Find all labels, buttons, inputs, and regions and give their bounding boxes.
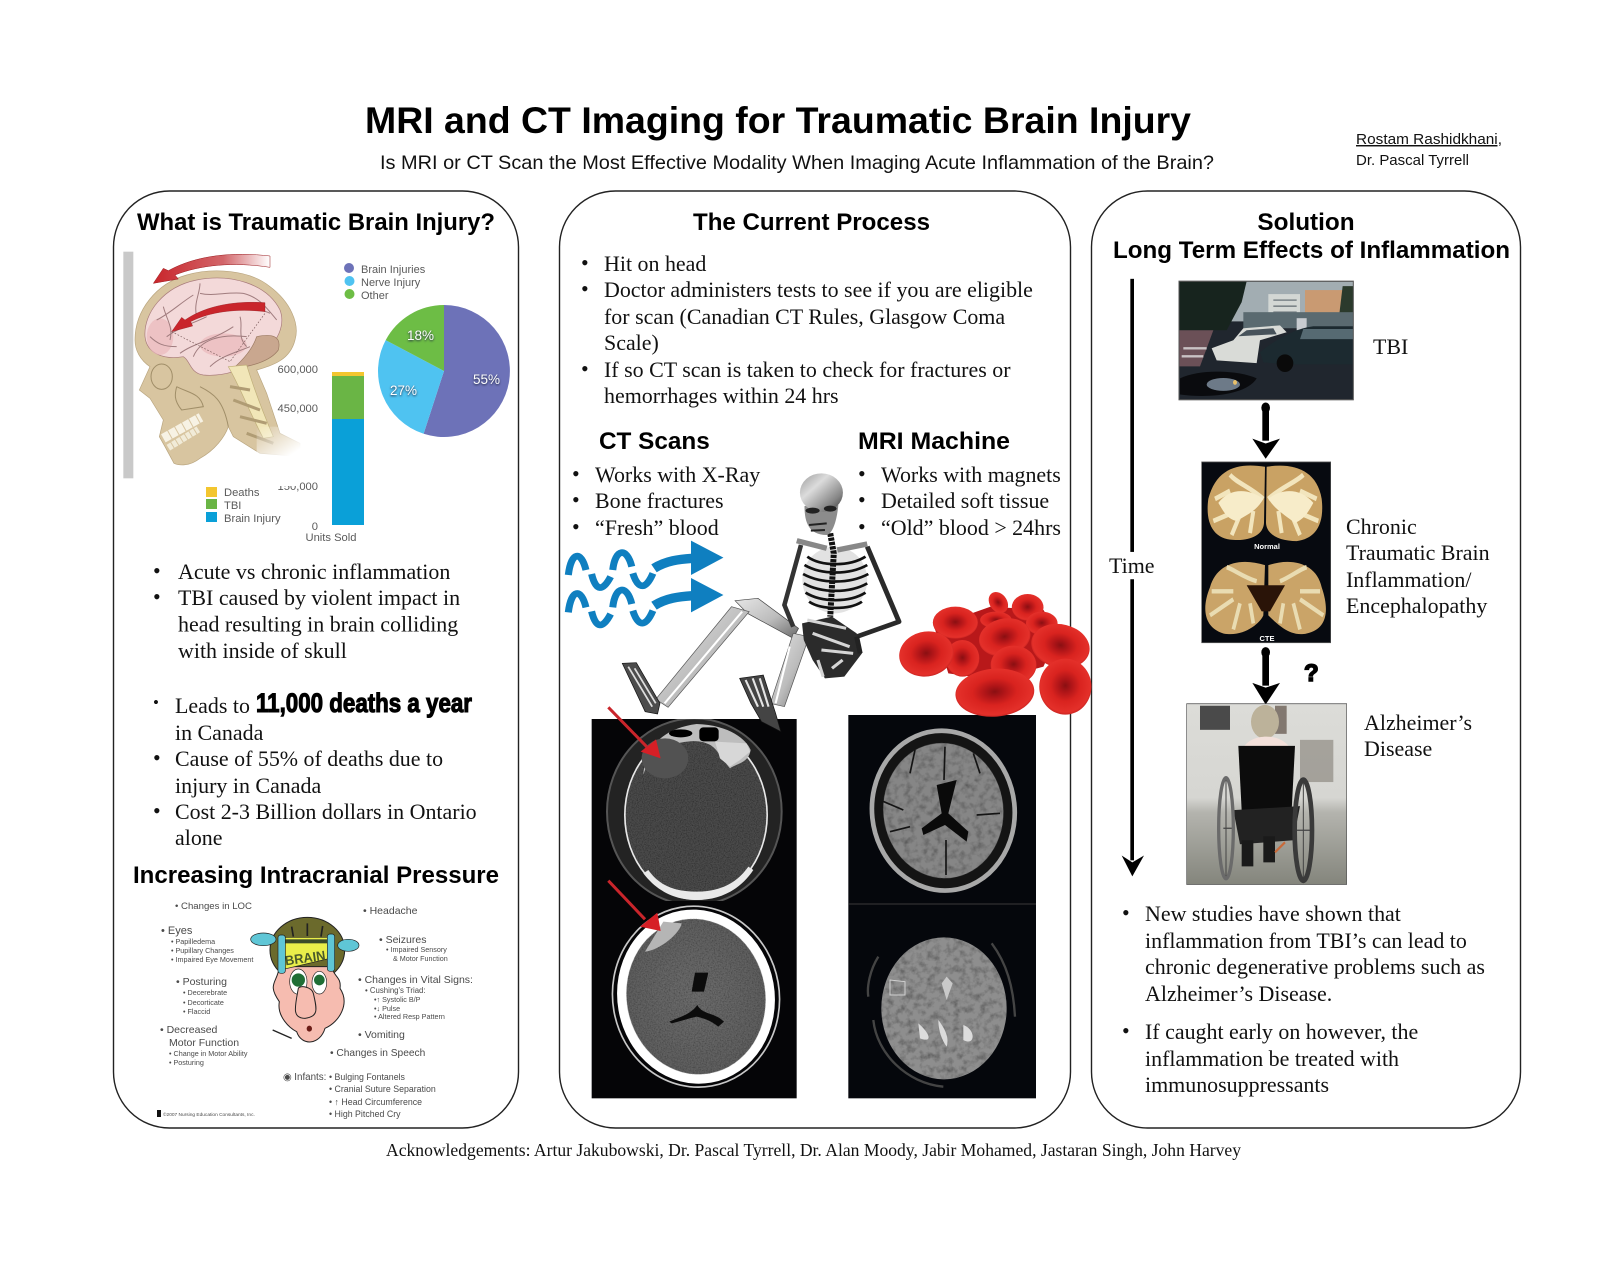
text block: solution bullets: • (1122, 900, 1130, 925)
authors: Rostam Rashidkhani, (1356, 132, 1502, 148)
brain label: CTE: CTE (1260, 634, 1274, 643)
acknowledgements: Acknowledgements: Artur Jakubowski, Dr. Pascal Tyrrell, Dr. Alan Moody, Jabir Mohamed, Jastaran Singh, John Harvey (386, 1140, 1241, 1160)
skull (805, 505, 838, 535)
cerebellum (233, 335, 279, 368)
stacked bar chart: 0 (312, 521, 318, 533)
text: ICP symptoms: • Seizures (379, 934, 426, 946)
CT scan: hemorrhage slice (598, 893, 794, 1100)
text block: current process bullets: • (581, 250, 589, 275)
icon: cartoon brain head: BRAIN (284, 948, 326, 968)
text block: solution bullets: New studies have shown that (1145, 901, 1401, 926)
label: Alzheimer's disease: Alzheimer’s (1364, 710, 1472, 735)
text: ICP symptoms: • Changes in Vital Signs: (358, 974, 473, 986)
text: ICP symptoms: • Vomiting (358, 1029, 405, 1041)
text block: solution bullets: Alzheimer’s Disease. (1145, 981, 1332, 1006)
pie chart: 18% (407, 328, 434, 343)
stacked bar chart: 450,000 (278, 403, 318, 415)
panel: the current process (560, 191, 1070, 1128)
text block: solution bullets (1122, 900, 1485, 1097)
teeth (163, 417, 201, 438)
arrow: TBI to CTE (1252, 403, 1280, 459)
text block: current process bullets: Hit on head (604, 251, 706, 276)
stacked bar chart: Units Sold (306, 532, 356, 544)
text block: inflammation bullets: head resulting in brain colliding (178, 612, 458, 636)
feet (622, 663, 660, 714)
text block: inflammation bullets: with inside of skull (178, 638, 347, 663)
text block: CT bullets: Bone fractures (595, 488, 724, 513)
text: ICP symptoms: • High Pitched Cry (329, 1109, 401, 1119)
label: chronic traumatic brain inflammation: Chronic (1346, 514, 1417, 539)
text block: statistics bullets: • (153, 693, 159, 712)
second leg (770, 633, 809, 707)
label: Alzheimer's disease (1364, 710, 1472, 761)
bar chart legend: Deaths (224, 487, 260, 499)
text: ICP symptoms: • Changes in Speech (330, 1048, 425, 1059)
text block: statistics bullets: • (153, 745, 161, 770)
bar chart legend: TBI (224, 500, 241, 512)
text block: current process bullets (581, 250, 1033, 408)
head outline (135, 271, 300, 465)
sulci (150, 283, 277, 367)
text: ICP symptoms: ©2007 Nursing Education Consultants, Inc. (163, 1111, 255, 1118)
text block: current process bullets: • (581, 276, 589, 301)
MRI images (848, 715, 1036, 1098)
text block: solution bullets: If caught early on however, the (1145, 1019, 1418, 1044)
label: time: Time (1109, 553, 1155, 578)
pie chart legend: Brain Injuries (361, 264, 426, 276)
photo: brain slices (1202, 462, 1331, 643)
text: ICP symptoms: • Cushing's Triad: (365, 986, 426, 995)
label: chronic traumatic brain inflammation (1346, 514, 1490, 618)
text block: inflammation bullets: Acute vs chronic inflammation (178, 559, 450, 584)
text: ICP symptoms: •↑ Systolic B/P (374, 995, 421, 1004)
photo: patient in wheelchair (1187, 704, 1347, 884)
text: ICP symptoms: • Impaired Sensory (386, 945, 447, 954)
label: chronic traumatic brain inflammation: Traumatic Brain (1346, 540, 1490, 565)
text block: statistics bullets (153, 688, 477, 850)
page title: MRI and CT Imaging for Traumatic Brain Injury (365, 99, 1191, 141)
red arrows (608, 707, 647, 747)
text block: solution bullets: inflammation from TBI’s can lead to (1145, 928, 1467, 953)
spinal cord (228, 365, 273, 438)
label: question mark: ? (1304, 660, 1319, 687)
text: ICP symptoms: •↓ Pulse (374, 1004, 400, 1013)
MRI scan: gradient echo slice (881, 937, 1007, 1079)
text block: CT bullets: “Fresh” blood (595, 515, 719, 540)
text block: MRI bullets: “Old” blood > 24hrs (881, 515, 1061, 540)
brain (145, 278, 282, 375)
heading: increasing intracranial pressure: Increasing Intracranial Pressure (133, 862, 499, 889)
text block: CT bullets: Works with X-Ray (595, 462, 760, 487)
text: ICP symptoms: • Altered Resp Pattern (374, 1012, 445, 1021)
text block: CT bullets (572, 461, 760, 540)
label: TBI: TBI (1373, 334, 1408, 359)
heading: the current process: The Current Process (693, 209, 930, 236)
text block: MRI bullets: Works with magnets (881, 462, 1061, 487)
text block: inflammation bullets: • (153, 558, 161, 583)
text block: inflammation bullets: TBI caused by violent impact in (178, 585, 460, 610)
label: Alzheimer's disease: Disease (1364, 736, 1432, 761)
text block: inflammation bullets: • (153, 584, 161, 609)
stacked bar chart: 600,000 (278, 364, 318, 376)
gray wall bar (123, 252, 133, 478)
text block: MRI bullets: • (858, 487, 866, 512)
pie chart: 55% (473, 372, 500, 387)
text block: solution bullets: immunosuppressants (1145, 1072, 1329, 1097)
text block: statistics bullets: injury in Canada (175, 773, 321, 798)
text: ICP symptoms: • Eyes (161, 925, 193, 937)
text block: inflammation bullets (153, 558, 460, 663)
text: ICP symptoms: • Changes in LOC (175, 901, 252, 912)
text block: statistics bullets: 11,000 deaths a year (256, 688, 472, 718)
MRI scan: FLAIR slice (864, 724, 1023, 898)
text block: CT bullets: • (572, 461, 580, 486)
text: ICP symptoms: • Change in Motor Ability (169, 1049, 248, 1058)
CT scan: skull bone window (607, 718, 782, 905)
text block: statistics bullets: • (153, 798, 161, 823)
text: ICP symptoms: • Decerebrate (183, 988, 227, 997)
text: ICP symptoms (157, 901, 473, 1119)
text: ICP symptoms: & Motor Function (393, 954, 448, 963)
text block: CT bullets: • (572, 487, 580, 512)
brain label: normal: Normal (1254, 542, 1280, 551)
text block: CT bullets: • (572, 514, 580, 539)
label: chronic traumatic brain inflammation: Encephalopathy (1346, 593, 1487, 618)
authors: Dr. Pascal Tyrrell (1356, 153, 1469, 169)
text block: solution bullets: • (1122, 1018, 1130, 1043)
pie chart legend (344, 263, 426, 302)
heading: solution (1113, 209, 1510, 264)
label: chronic traumatic brain inflammation: Inflammation/ (1346, 567, 1472, 592)
text: ICP symptoms: • Posturing (169, 1058, 204, 1067)
impact arrows (153, 254, 270, 283)
heading: solution: Solution (1257, 209, 1355, 236)
raised leg (735, 598, 799, 638)
text block: MRI bullets (858, 461, 1061, 540)
text block: statistics bullets: Cost 2-3 Billion dollars in Ontario (175, 799, 477, 824)
bar chart legend (206, 487, 281, 525)
text: ICP symptoms: • Flaccid (183, 1007, 210, 1016)
text: ICP symptoms: • ↑ Head Circumference (329, 1097, 422, 1107)
bar chart legend: Brain Injury (224, 513, 281, 525)
illustration: seated skeleton (622, 473, 899, 732)
heading: what is TBI: What is Traumatic Brain Injury? (137, 209, 495, 236)
text block: statistics bullets: Leads to (175, 693, 250, 718)
shoulders and arms (797, 541, 867, 550)
text block: current process bullets: for scan (Canadian CT Rules, Glasgow Coma (604, 304, 1005, 329)
photo: car crash (1179, 281, 1353, 400)
fade (257, 427, 320, 470)
text: ICP symptoms: • Headache (363, 905, 418, 917)
text block: current process bullets: If so CT scan is taken to check for fractures or (604, 357, 1011, 382)
icon: cartoon brain head (251, 917, 359, 1042)
pie chart (378, 305, 510, 437)
panel: solution (1092, 191, 1520, 1128)
illustration: skull and brain with impact arrows (123, 252, 320, 478)
arrow: time axis (1122, 279, 1144, 876)
text block: statistics bullets: Cause of 55% of deaths due to (175, 746, 443, 771)
pie chart legend: Other (361, 290, 389, 302)
heading: CT scans: CT Scans (599, 428, 710, 455)
text: ICP symptoms: ◉ Infants: (283, 1072, 326, 1083)
text: ICP symptoms: • Bulging Fontanels (329, 1072, 406, 1082)
text block: current process bullets: Scale) (604, 330, 659, 355)
text: ICP symptoms: • Papilledema (171, 937, 215, 946)
text block: MRI bullets: Detailed soft tissue (881, 488, 1049, 513)
text block: statistics bullets: in Canada (175, 720, 264, 745)
heading: MRI machine: MRI Machine (858, 428, 1010, 455)
arrow: CTE to Alzheimer's (1252, 647, 1280, 705)
text: ICP symptoms: • Impaired Eye Movement (171, 955, 253, 964)
vertebrae (230, 387, 273, 443)
subtitle: Is MRI or CT Scan the Most Effective Modality When Imaging Acute Inflammation of the Brain? (380, 152, 1214, 174)
panel: what is traumatic brain injury (114, 191, 518, 1128)
text block: statistics bullets: alone (175, 825, 223, 850)
text: ICP symptoms: • Posturing (176, 976, 227, 988)
text: ICP symptoms: Motor Function (169, 1037, 239, 1049)
text block: current process bullets: hemorrhages within 24 hrs (604, 383, 839, 408)
authors (1356, 132, 1502, 169)
text: ICP symptoms: • Cranial Suture Separation (329, 1084, 436, 1094)
illustration: red blood cells (894, 589, 1095, 720)
text: ICP symptoms: • Decreased (160, 1024, 218, 1036)
eye socket (151, 364, 172, 389)
ribcage (802, 547, 867, 613)
text block: MRI bullets: • (858, 461, 866, 486)
text block: current process bullets: • (581, 356, 589, 381)
stacked bar chart (276, 364, 364, 544)
CT scan images (592, 707, 797, 1100)
text block: solution bullets: inflammation be treated with (1145, 1046, 1399, 1071)
text block: solution bullets: chronic degenerative problems such as (1145, 954, 1485, 979)
pie chart legend: Nerve Injury (361, 277, 421, 289)
text: ICP symptoms: • Decorticate (183, 998, 224, 1007)
text block: MRI bullets: • (858, 514, 866, 539)
pelvis (802, 617, 862, 678)
icon: x-ray waves with arrows (568, 541, 723, 625)
stacked bar chart: 150,000 (278, 481, 318, 493)
heading: solution: Long Term Effects of Inflammation (1113, 237, 1510, 264)
text block: current process bullets: Doctor administers tests to see if you are eligible (604, 277, 1033, 302)
pie chart: 27% (390, 383, 417, 398)
text: ICP symptoms: • Pupillary Changes (171, 946, 234, 955)
